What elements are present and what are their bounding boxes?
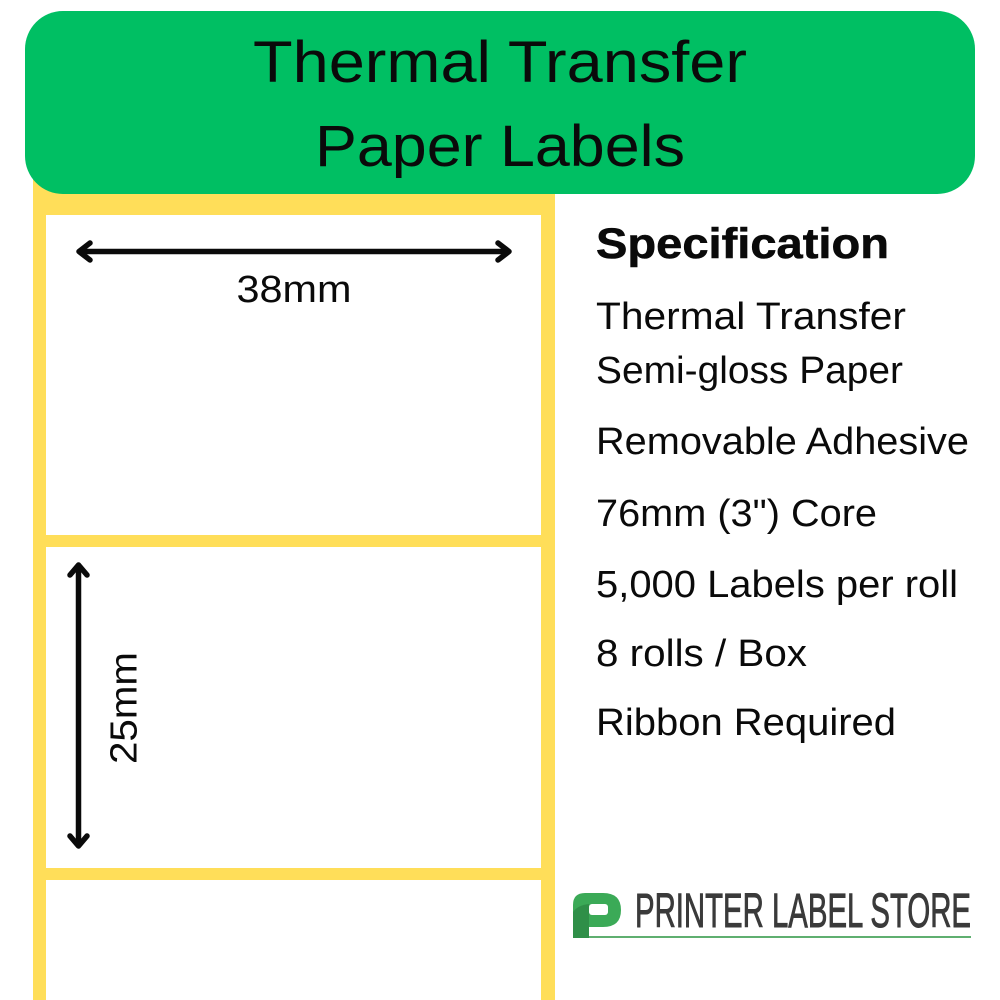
logo: Printer Label Store bbox=[573, 885, 971, 938]
spec: adhesive: Removable Adhesive bbox=[596, 421, 969, 463]
icon: green P mark bbox=[573, 893, 621, 938]
title line two: Paper Labels bbox=[315, 114, 685, 179]
arrow: height dimension bbox=[70, 565, 87, 846]
specification list bbox=[596, 296, 969, 744]
arrow: width dimension bbox=[79, 243, 509, 260]
spec: material line two: Semi-gloss Paper bbox=[596, 350, 903, 392]
label three bbox=[46, 880, 541, 1000]
spec: labels per roll: 5,000 Labels per roll bbox=[596, 564, 958, 606]
title line one: Thermal Transfer bbox=[253, 30, 747, 95]
spec: material line one: Thermal Transfer bbox=[596, 296, 906, 338]
spec: core: 76mm (3") Core bbox=[596, 493, 877, 535]
height label: 25mm bbox=[104, 652, 146, 764]
spec: rolls per box: 8 rolls / Box bbox=[596, 633, 807, 675]
title banner bbox=[25, 11, 975, 194]
spec: ribbon: Ribbon Required bbox=[596, 702, 896, 744]
label two bbox=[46, 547, 541, 868]
panel: label roll backing bbox=[33, 150, 555, 1000]
specification heading: Specification bbox=[596, 220, 889, 268]
label one bbox=[46, 215, 541, 535]
width label: 38mm bbox=[236, 269, 352, 311]
